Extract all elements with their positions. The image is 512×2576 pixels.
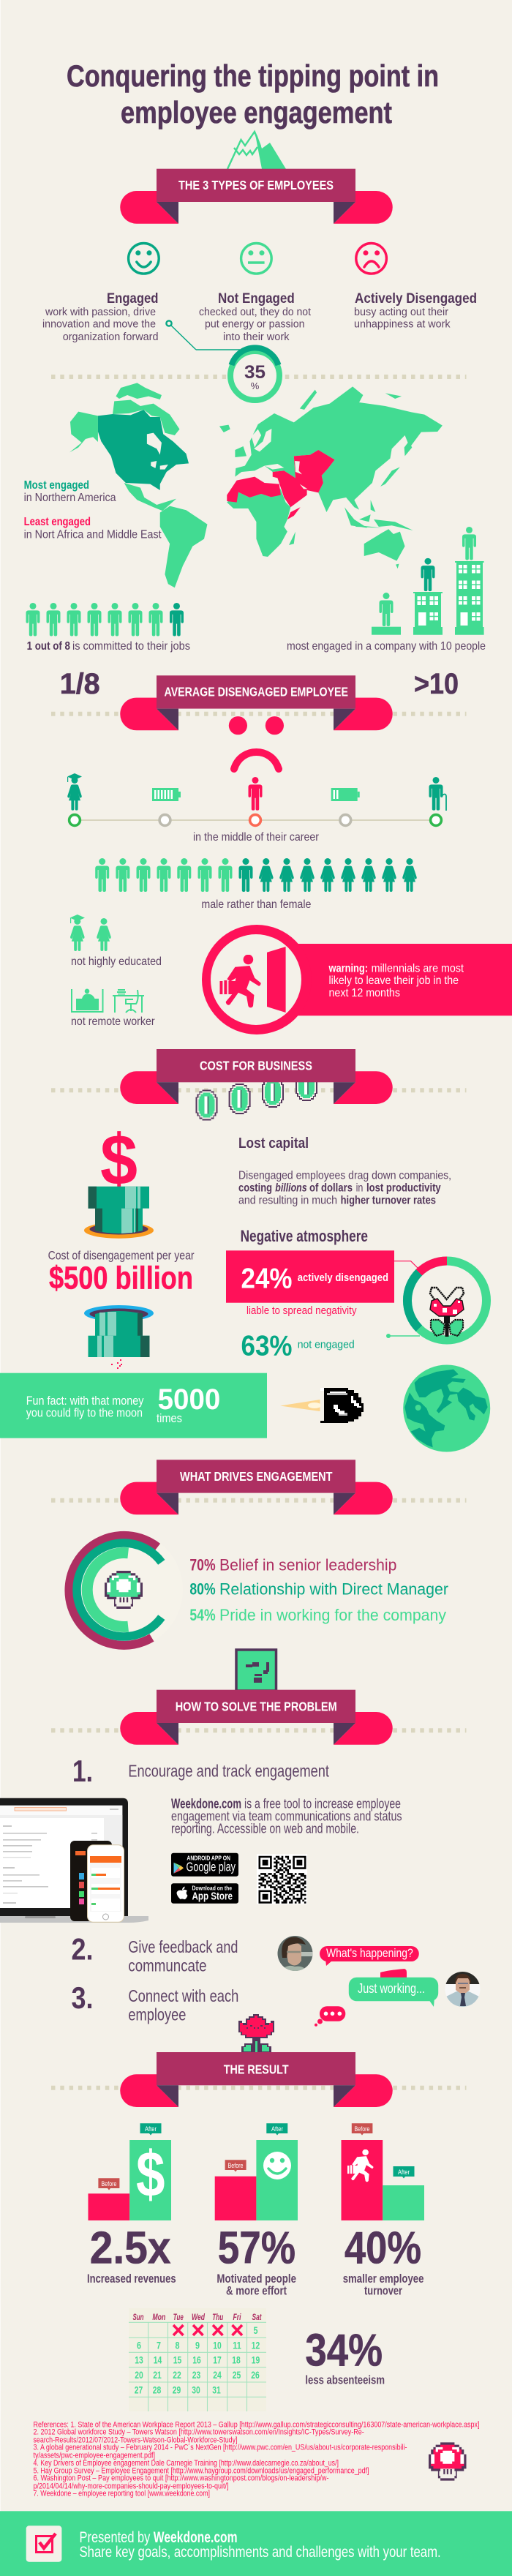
step 2: Give feedback and — [128, 1937, 238, 1956]
heading: actively disengaged: Actively Disengaged — [355, 290, 477, 307]
text: lost capital: Lost capital — [238, 1135, 309, 1152]
step 2: communcate — [128, 1956, 207, 1975]
caption: middle of career: in the middle of their career — [193, 831, 320, 844]
heading: engaged: Engaged — [107, 290, 158, 307]
calendar: 15 — [173, 2354, 181, 2366]
pictogram: not remote worker: not remote worker — [71, 1015, 155, 1028]
text: lost capital — [238, 1135, 451, 1207]
calendar: Sat — [252, 2313, 262, 2322]
pictogram: 1 out of 8 committed — [26, 603, 190, 653]
text: lost capital: costing — [238, 1182, 272, 1194]
section banner: what drives engagement — [120, 1460, 393, 1514]
stat: 57 percent: 57% — [218, 2223, 295, 2273]
portrait: employee — [445, 1972, 481, 2008]
calendar: 22 — [173, 2369, 181, 2381]
step 3: 3. — [72, 1980, 94, 2015]
panel: actively disengaged — [354, 243, 477, 331]
description: engaged: organization forward — [63, 331, 158, 343]
pictogram: not highly educated — [70, 915, 162, 968]
section banner: the 3 types of employees: THE 3 TYPES OF EMPLOYEES — [178, 178, 334, 192]
references: 4. Key Drivers of Employee engagement Dale Carnegie Training [http://www.dalecarnegie.co.za/about_us/] — [34, 2459, 339, 2468]
callout: millennials warning — [202, 925, 512, 1034]
portrait: boss — [277, 1936, 313, 1971]
icon: qr code — [257, 1854, 307, 1904]
text: weekdone description: engagement via team communications and status — [171, 1809, 402, 1823]
pictogram: not highly educated: not highly educated — [71, 955, 162, 968]
calendar: Sun — [133, 2313, 143, 2322]
icon: mountain — [227, 130, 286, 169]
callout: 24 percent actively disengaged: liable to spread negativity — [246, 1304, 357, 1317]
illustration: laptop and phones — [0, 1798, 148, 1923]
description: actively disengaged — [354, 306, 451, 331]
text: weekdone description: Weekdone.com — [171, 1797, 241, 1811]
label: after — [266, 2123, 287, 2135]
section banner: cost for business — [120, 1049, 393, 1104]
label: before: Before — [228, 2162, 243, 2170]
timeline: career stage — [67, 773, 446, 844]
chart: 35 percent ring — [166, 320, 279, 400]
badge: google play: ANDROID APP ON — [187, 1854, 230, 1861]
description: actively disengaged: unhappiness at work — [354, 318, 451, 331]
text: most and least engaged: Most engaged — [24, 479, 89, 492]
references: 5. Hay Group Survey – Employee Engagement [http://www.haygroup.com/downloads/us/engaged_performance_pdf] — [34, 2466, 369, 2475]
chart: increased revenues — [87, 2123, 176, 2286]
description: actively disengaged: busy acting out their — [354, 306, 448, 318]
warning text: likely to leave their job in the — [329, 975, 459, 987]
calendar: 25 — [233, 2369, 241, 2381]
speech bubble: typing — [315, 2006, 345, 2027]
label: before — [352, 2123, 372, 2135]
calendar: 17 — [213, 2354, 222, 2366]
calendar: 16 — [192, 2354, 201, 2366]
calendar: 19 — [252, 2354, 260, 2366]
calendar: 31 — [212, 2384, 221, 2396]
step 1 heading: 1. — [72, 1754, 93, 1788]
label: before — [225, 2160, 246, 2171]
chart: smaller employee turnover — [341, 2123, 424, 2298]
text: engagement drivers: 70% — [189, 1556, 216, 1574]
calendar: 30 — [192, 2384, 200, 2396]
icon: pipe with falling money — [84, 1305, 154, 1369]
section banner: the result — [120, 2052, 393, 2107]
text: lost capital: and resulting in much — [238, 1195, 337, 1207]
footer text — [79, 2529, 441, 2561]
title: Conquering the tipping point in — [67, 59, 439, 93]
title — [67, 59, 439, 129]
footer — [0, 2511, 512, 2576]
caption: smaller employee turnover: smaller employee — [343, 2272, 424, 2286]
references: 7. Weekdone – employee reporting tool [www.weekdone.com] — [34, 2490, 210, 2498]
calendar: 9 — [195, 2340, 200, 2351]
pictogram: company size buildings: most engaged in a company with 10 people — [287, 640, 486, 653]
text: engagement drivers: Belief in senior leadership — [219, 1556, 396, 1574]
icon: full battery — [152, 788, 181, 801]
callout: fun fact: Fun fact: with that money — [26, 1394, 144, 1408]
step 2 — [72, 1931, 238, 1975]
text: weekdone description: reporting. Accessible on web and mobile. — [171, 1822, 359, 1836]
label: after: After — [145, 2125, 157, 2133]
references: 3. A global generational study – February 2014 - PwC´s NextGen [http://www.pwc.com/en_US/us/about-us/corporate-responsibili- — [34, 2444, 407, 2452]
section banner: average disengaged employee: AVERAGE DISENGAGED EMPLOYEE — [164, 685, 348, 699]
stat: 1/8: 1/8 — [60, 668, 100, 700]
stat: 63 percent not engaged — [241, 1330, 355, 1362]
pictogram: not remote worker — [71, 989, 155, 1028]
stat: cost of disengagement: $500 billion — [49, 1261, 193, 1296]
calendar: 24 — [213, 2369, 222, 2381]
callout: 24 percent actively disengaged: actively disengaged — [298, 1272, 388, 1284]
text: weekdone description — [171, 1797, 402, 1836]
chart: engagement driver rings — [64, 1531, 183, 1649]
icon: bullet with flame — [280, 1388, 364, 1423]
icon: elderly man with cane — [429, 777, 446, 811]
text: most and least engaged: Least engaged — [24, 516, 91, 528]
chart: motivated people — [215, 2123, 298, 2298]
pictogram: 1 out of 8 committed: 1 out of 8 — [27, 640, 70, 653]
pictogram: company size buildings — [287, 527, 486, 653]
calendar: 27 — [135, 2384, 143, 2396]
label: after: After — [398, 2168, 410, 2177]
section banner: the 3 types of employees — [120, 169, 393, 224]
icon: weekdone logo — [26, 2526, 61, 2562]
caption: increased revenues: Increased revenues — [87, 2272, 176, 2286]
calendar: 14 — [154, 2354, 162, 2366]
calendar: 21 — [153, 2369, 162, 2381]
text: lost capital: lost productivity — [366, 1182, 441, 1194]
text: lost capital: higher turnover rates — [341, 1195, 436, 1207]
references: p/2014/04/14/why-more-companies-should-pay-employees-to-quit/] — [34, 2482, 228, 2490]
calendar: 11 — [233, 2340, 241, 2351]
text: most and least engaged: in Nort Africa and Middle East — [24, 529, 162, 541]
text: lost capital: in — [356, 1182, 363, 1194]
caption: motivated people: Motivated people — [217, 2272, 296, 2286]
calendar: 23 — [192, 2369, 200, 2381]
text: engagement drivers: 54% — [189, 1606, 216, 1624]
calendar: 28 — [153, 2384, 161, 2396]
description: engaged: work with passion, drive — [45, 306, 156, 318]
icon: person leaving through door — [219, 947, 286, 1013]
step 3 — [72, 1980, 238, 2024]
references — [34, 2420, 480, 2498]
description: engaged: innovation and move the — [42, 318, 156, 331]
label: after — [140, 2123, 161, 2135]
heading: not engaged: Not Engaged — [218, 290, 295, 307]
world map — [69, 383, 443, 587]
calendar: 18 — [232, 2354, 241, 2366]
icon: falling coins — [196, 1070, 317, 1121]
callout: 24 percent actively disengaged — [226, 1250, 394, 1317]
text: engagement drivers: 80% — [189, 1580, 216, 1598]
badge: app store — [171, 1883, 238, 1904]
callout: fun fact — [0, 1373, 267, 1438]
description: not engaged: put energy or passion — [205, 318, 304, 331]
label: before: Before — [101, 2180, 117, 2188]
badge: google play — [171, 1853, 238, 1877]
calendar: 6 — [137, 2340, 141, 2351]
icon: green mushroom — [105, 1571, 143, 1609]
speech bubble: what's happening: What's happening? — [326, 1946, 413, 1960]
chart: engagement donut with piranha plant — [386, 1261, 486, 1340]
text: lost capital: billions — [275, 1182, 307, 1194]
speech bubble: just working — [349, 1978, 438, 2007]
text: engagement drivers: Pride in working for the company — [219, 1606, 446, 1624]
text: negative atmosphere heading: Negative atmosphere — [241, 1227, 368, 1245]
calendar: Fri — [233, 2313, 241, 2322]
references: 2. 2012 Global workforce Study – Towers Watson [http://www.towerswatson.com/en/Insights/IC-Types/Survey-Re- — [34, 2428, 364, 2437]
calendar: Tue — [173, 2313, 184, 2322]
step 3: employee — [128, 2005, 186, 2024]
chart: 35 percent ring: % — [251, 380, 260, 391]
calendar: 13 — [135, 2354, 143, 2366]
text: lost capital: of dollars — [309, 1182, 353, 1194]
calendar: 26 — [251, 2369, 260, 2381]
caption: smaller employee turnover — [343, 2272, 424, 2298]
icon: piranha plant — [430, 1288, 464, 1337]
footer text: Weekdone.com — [154, 2529, 238, 2546]
icon: low battery — [331, 788, 360, 801]
icon: dollar in pipe — [84, 1119, 154, 1239]
chart: increased revenues: $ — [136, 2138, 165, 2210]
section banner: the result: THE RESULT — [224, 2062, 289, 2076]
text: engagement drivers — [189, 1556, 448, 1624]
section banner: what drives engagement: WHAT DRIVES ENGAGEMENT — [180, 1469, 333, 1484]
chart: 35 percent ring: 35 — [244, 362, 266, 383]
icon: neutral face — [241, 243, 271, 274]
icon: happy face — [129, 243, 159, 274]
callout: fun fact: 5000 — [158, 1383, 220, 1416]
pictogram: 1 out of 8 committed: is committed to their jobs — [72, 640, 190, 653]
badge: app store: App Store — [192, 1890, 233, 1903]
stat: 63 percent not engaged: not engaged — [298, 1339, 355, 1351]
icon: pink mushroom — [429, 2442, 467, 2481]
icon: mid-career man — [249, 777, 262, 811]
text: most and least engaged — [24, 479, 162, 541]
description: not engaged: into their work — [223, 331, 290, 343]
calendar: 20 — [135, 2369, 143, 2381]
caption: smaller employee turnover: turnover — [364, 2284, 402, 2298]
stat: 34 percent less absenteeism: 34% — [305, 2325, 383, 2376]
calendar: 8 — [176, 2340, 180, 2351]
icon: moon — [403, 1365, 490, 1452]
stat: 2.5x: 2.5x — [90, 2223, 171, 2273]
text: most and least engaged: in Northern America — [24, 492, 116, 504]
stat: 40 percent: 40% — [345, 2223, 421, 2273]
panel: engaged — [42, 243, 159, 343]
section banner: how to solve the problem — [120, 1690, 393, 1745]
calendar: 12 — [252, 2340, 260, 2351]
pictogram: male rather than female — [95, 858, 417, 911]
section banner: how to solve the problem: HOW TO SOLVE THE PROBLEM — [176, 1699, 337, 1713]
caption: motivated people: & more effort — [226, 2284, 287, 2298]
section banner: average disengaged employee — [120, 675, 393, 730]
label: before: Before — [354, 2125, 370, 2133]
label: before — [98, 2178, 119, 2190]
description: engaged — [42, 306, 158, 343]
step 2: 2. — [72, 1931, 94, 1966]
stat: 34 percent less absenteeism: less absenteeism — [305, 2373, 385, 2387]
warning text: warning: — [328, 962, 368, 975]
icon: question block — [236, 1650, 276, 1691]
icon: sad face — [356, 243, 386, 274]
stat: more than 10: >10 — [414, 668, 459, 700]
description: not engaged: checked out, they do not — [199, 306, 312, 318]
calendar: Mon — [152, 2313, 165, 2322]
calendar: Wed — [192, 2313, 206, 2322]
text: engagement drivers: Relationship with Direct Manager — [219, 1580, 448, 1598]
stat: cost of disengagement: Cost of disengagement per year — [48, 1249, 195, 1263]
icon: graduate — [67, 773, 82, 811]
calendar: 5 — [253, 2324, 258, 2336]
description: not engaged — [199, 306, 312, 343]
step 1 heading: Encourage and track engagement — [128, 1761, 329, 1780]
callout: 24 percent actively disengaged: 24% — [241, 1263, 293, 1295]
callout: fun fact: you could fly to the moon — [26, 1406, 143, 1420]
footer text: Presented by — [79, 2529, 151, 2546]
callout: fun fact: times — [157, 1411, 182, 1425]
label: after: After — [271, 2125, 283, 2133]
title: employee engagement — [121, 95, 392, 129]
warning text — [328, 962, 464, 999]
calendar: 29 — [173, 2384, 181, 2396]
label: after — [394, 2166, 414, 2179]
step 1 heading — [72, 1754, 329, 1788]
icon: stapler — [380, 1969, 407, 1978]
panel: not engaged — [199, 243, 312, 343]
text: weekdone description: is a free tool to increase employee — [244, 1797, 401, 1811]
icon: fire flower — [238, 2014, 274, 2052]
warning text: next 12 months — [329, 987, 400, 999]
badge: app store: Download on the — [192, 1885, 232, 1892]
caption: motivated people — [217, 2272, 296, 2298]
calendar: 10 — [213, 2340, 222, 2351]
stat: cost of disengagement — [48, 1249, 195, 1296]
speech bubble: what's happening — [320, 1946, 419, 1966]
calendar: 7 — [157, 2340, 161, 2351]
stat: 63 percent not engaged: 63% — [241, 1330, 293, 1362]
calendar — [129, 2308, 266, 2411]
step 3: Connect with each — [128, 1986, 238, 2005]
calendar: Thu — [212, 2313, 223, 2322]
text: lost capital: Disengaged employees drag down companies, — [238, 1169, 451, 1182]
icon: dollar in pipe: $ — [100, 1119, 138, 1200]
speech bubble: just working: Just working... — [358, 1981, 425, 1996]
references: ty/assets/pwc-employee-engagement.pdf] — [34, 2451, 155, 2460]
references: 6. Washington Post – Pay employees to quit [http://www.washingtonpost.com/blogs/on-leadership/w- — [34, 2474, 329, 2483]
warning text: millennials are most — [372, 962, 464, 975]
references: search-Results/2012/07/2012-Towers-Watson-Global-Workforce-Study] — [34, 2436, 237, 2444]
icon: big sad face — [229, 716, 284, 769]
pictogram: male rather than female: male rather than female — [201, 898, 311, 911]
badge: google play: Google play — [186, 1859, 236, 1874]
section banner: cost for business: COST FOR BUSINESS — [200, 1059, 312, 1073]
